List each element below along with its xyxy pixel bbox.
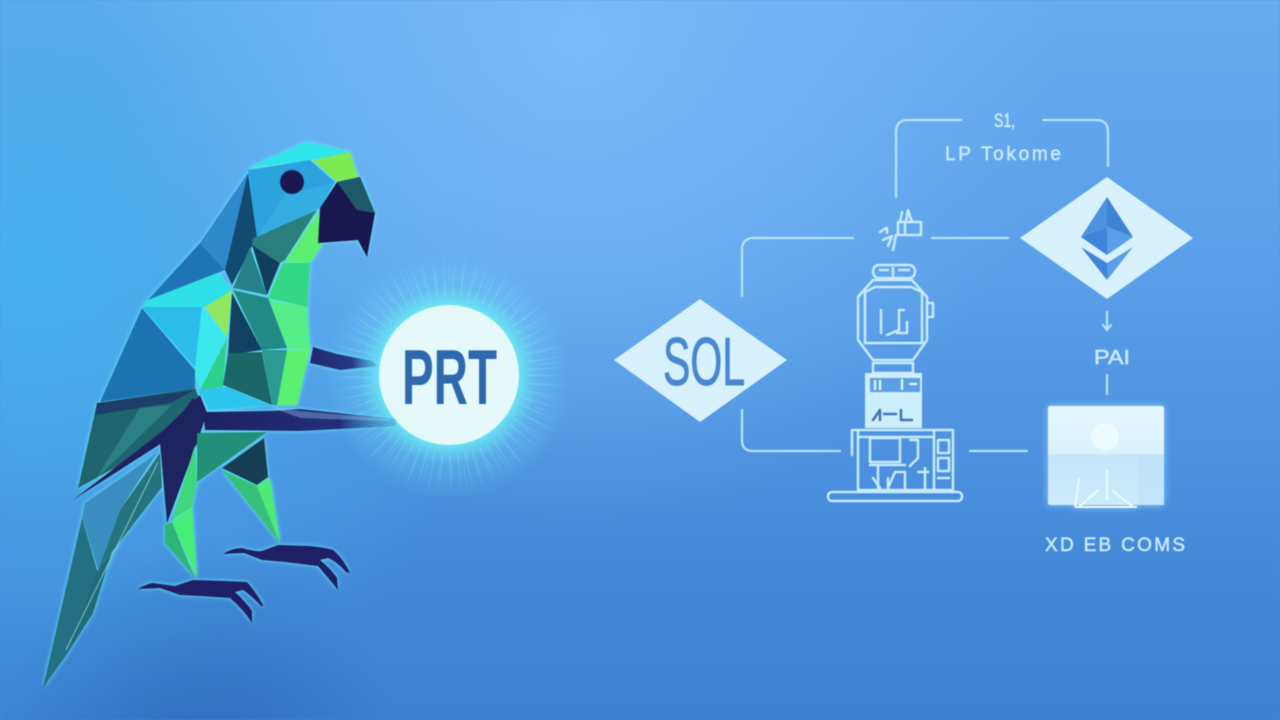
parrot eye — [280, 170, 304, 194]
top label: S1: S1, — [994, 111, 1015, 132]
Ethereum diamond — [1020, 177, 1193, 299]
PRT label: PRT — [402, 333, 497, 421]
parrot tail — [43, 453, 162, 688]
parrot arms reaching to token — [203, 347, 396, 431]
robot platform — [828, 492, 962, 501]
parrot lower wing — [73, 388, 207, 523]
parrot beak — [318, 177, 375, 257]
bottom label: XD EB COMS: XD EB COMS — [1045, 535, 1185, 556]
robot head — [858, 265, 933, 373]
robot machine line icon — [828, 210, 962, 501]
label: LP Tokome: LP Tokome — [945, 144, 1061, 165]
parrot head — [248, 142, 375, 257]
parrot legs — [165, 432, 280, 578]
robot base cabinet — [852, 430, 953, 490]
connector lines — [742, 120, 1111, 451]
robot column — [865, 373, 922, 428]
parrot feet — [138, 545, 350, 623]
SOL label: SOL — [663, 324, 745, 400]
parrot illustration — [43, 142, 396, 688]
glowing square box — [1048, 406, 1164, 507]
robot top glyph — [880, 210, 921, 250]
label: PAI: PAI — [1094, 347, 1130, 369]
icon: Ethereum logo — [1081, 197, 1133, 280]
SOL diamond — [614, 299, 787, 422]
PRT token with glow — [324, 250, 574, 500]
parrot body feathers — [100, 173, 322, 410]
